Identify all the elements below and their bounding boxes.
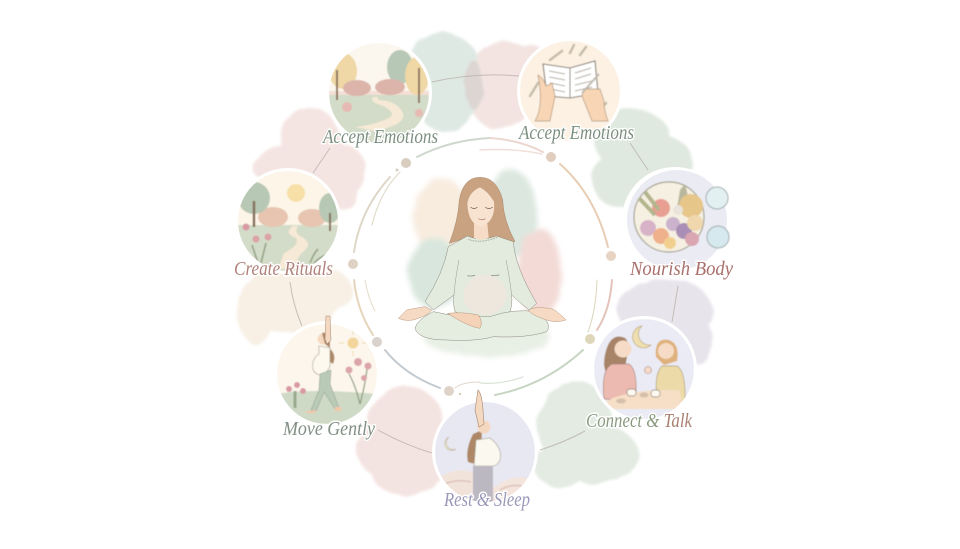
hands [398, 307, 432, 320]
medallion: accept emotions park [326, 40, 432, 146]
infographic: wellness wheel [235, 30, 733, 510]
medallion: create rituals landscape [235, 168, 341, 275]
label: accept emotions right: Accept Emotions [517, 122, 634, 144]
label: connect and talk: Connect & Talk [586, 410, 693, 432]
central ring with dots [348, 138, 616, 396]
label: move gently: Move Gently [282, 418, 375, 440]
medallion: nourish body bowl [622, 167, 729, 273]
medallion: accept emotions journal [517, 38, 623, 144]
connector lines [290, 75, 678, 453]
label: rest and sleep: Rest & Sleep [443, 489, 530, 511]
neck and face [474, 223, 489, 240]
medallion: rest and sleep [432, 390, 538, 505]
medallion: connect and talk [591, 316, 697, 422]
torso and arms [425, 236, 537, 319]
arm inner folds [454, 260, 512, 295]
raised arms [325, 316, 331, 344]
hair [449, 177, 515, 243]
medallion: move gently [274, 316, 380, 427]
label: create rituals: Create Rituals [234, 258, 333, 280]
foot [447, 313, 481, 328]
label: nourish body: Nourish Body [629, 258, 733, 280]
raised arm [475, 390, 484, 427]
label: accept emotions left: Accept Emotions [321, 126, 438, 148]
watercolor blobs [238, 33, 712, 496]
belly wash [463, 275, 507, 315]
legs [415, 311, 549, 340]
central figure: meditating pregnant woman [398, 170, 566, 357]
